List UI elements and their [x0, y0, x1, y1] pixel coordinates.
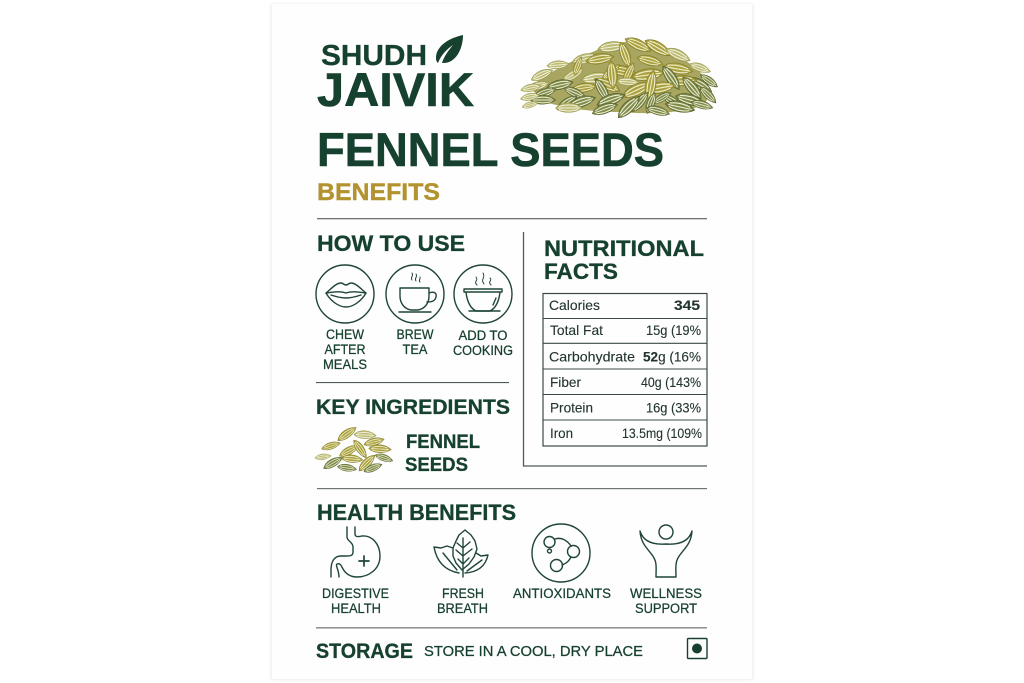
- label: antioxidants: ANTIOXIDANTS: [513, 586, 611, 601]
- icon: fennel seeds: [314, 424, 394, 475]
- text: fennel seeds: SEEDS: [405, 455, 468, 476]
- heading: health benefits: HEALTH BENEFITS: [317, 500, 516, 525]
- heading: nutritional facts: NUTRITIONAL: [544, 236, 704, 261]
- text: fennel seeds: [405, 432, 480, 476]
- text: storage instruction: STORE IN A COOL, DRY PLACE: [424, 643, 643, 660]
- heading: key ingredients: KEY INGREDIENTS: [316, 395, 510, 419]
- brand logo: [317, 35, 474, 116]
- label: fresh breath: FRESH: [442, 586, 484, 601]
- row: protein: 16g (33%: [646, 400, 701, 416]
- label: wellness support: SUPPORT: [635, 601, 697, 616]
- icon: leaf: [436, 35, 463, 63]
- panel: storage: [316, 638, 707, 663]
- nutrition table: [543, 294, 707, 446]
- label: add to cooking: [453, 328, 513, 358]
- row: fiber: [550, 374, 701, 390]
- row: calories: Calories: [549, 297, 600, 313]
- label: chew after meals: [323, 327, 367, 372]
- row: total fat: [550, 322, 701, 338]
- panel: key ingredients: [314, 395, 510, 476]
- title: FENNEL SEEDS: [317, 123, 664, 176]
- panel: health benefits: [317, 500, 702, 616]
- icon: tea cup: [386, 265, 444, 323]
- row: calories: 345: [674, 297, 700, 313]
- row: carbohydrate: [549, 348, 701, 364]
- heading: nutritional facts: [544, 236, 704, 284]
- subtitle: BENEFITS: [317, 179, 440, 206]
- panel: nutritional facts: [524, 232, 707, 466]
- label: wellness support: [630, 586, 702, 616]
- label: add to cooking: COOKING: [453, 343, 513, 358]
- icon: antioxidant molecules: [532, 524, 590, 582]
- text: fennel seeds: FENNEL: [406, 432, 480, 453]
- label: brew tea: TEA: [402, 342, 428, 357]
- panel: how to use: [316, 231, 513, 372]
- label: fresh breath: [437, 586, 488, 616]
- label: fresh breath: BREATH: [437, 601, 488, 616]
- heading: storage: STORAGE: [316, 640, 413, 663]
- row: total fat: 15g (19%: [646, 322, 701, 338]
- icon: mint leaf: [434, 530, 488, 577]
- row: carbohydrate: 52g (16%: [643, 348, 701, 364]
- brand name: shudh: SHUDH: [321, 40, 427, 72]
- row: protein: Protein: [550, 400, 593, 416]
- row: carbohydrate: Carbohydrate: [549, 348, 635, 364]
- label: add to cooking: ADD TO: [458, 328, 508, 343]
- icon: cooking bowl: [454, 265, 512, 323]
- label: chew after meals: CHEW: [326, 327, 364, 342]
- icon: stomach: [331, 527, 380, 577]
- heading: nutritional facts: FACTS: [544, 259, 618, 284]
- icon: wellness person: [640, 525, 692, 577]
- label: brew tea: [396, 327, 434, 357]
- icon: lips: [316, 265, 374, 323]
- label: brew tea: BREW: [396, 327, 434, 342]
- label: digestive health: HEALTH: [331, 601, 381, 616]
- row: fiber: Fiber: [550, 374, 581, 390]
- row: iron: 13.5mg (109%: [622, 425, 702, 441]
- label: chew after meals: AFTER: [324, 342, 366, 357]
- row: iron: Iron: [550, 425, 573, 441]
- label: digestive health: DIGESTIVE: [322, 586, 389, 601]
- row: calories: [549, 297, 700, 313]
- label: wellness support: WELLNESS: [630, 586, 702, 601]
- row: protein: [550, 400, 701, 416]
- illustration: fennel seed pile: [520, 34, 720, 121]
- card background: [271, 4, 753, 680]
- brand name: jaivik: JAIVIK: [317, 63, 474, 116]
- label: digestive health: [322, 586, 389, 616]
- heading: how to use: HOW TO USE: [317, 231, 465, 256]
- label: chew after meals: MEALS: [323, 357, 367, 372]
- row: iron: [550, 425, 702, 441]
- icon: vegetarian mark: [688, 638, 707, 658]
- row: fiber: 40g (143%: [641, 374, 701, 390]
- panel frame: [524, 232, 707, 466]
- row: total fat: Total Fat: [550, 322, 603, 338]
